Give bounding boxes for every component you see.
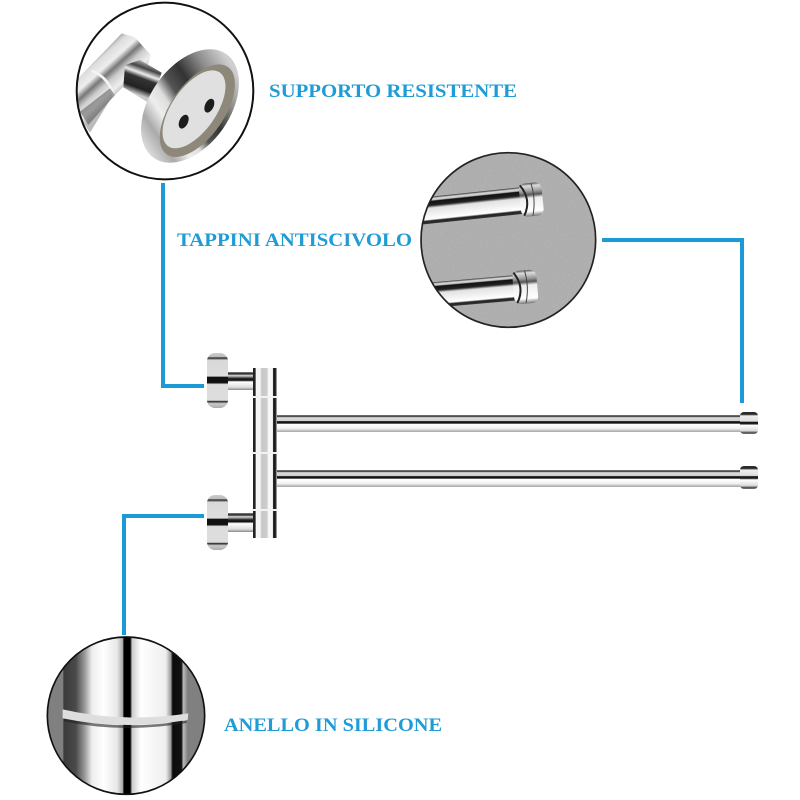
vertical column — [253, 368, 277, 538]
lower wall disc — [207, 495, 228, 550]
lower tube and cap — [432, 270, 538, 306]
connector line: anello to lower mount — [124, 516, 204, 635]
lower bar cap — [740, 466, 758, 489]
screw hole left — [177, 113, 191, 130]
upper stem — [226, 372, 255, 390]
silicone rings — [252, 396, 278, 511]
detail circle: anti-slip caps — [413, 152, 597, 328]
heading: anello in silicone: ANELLO IN SILICONE — [224, 715, 442, 736]
upper swing bar — [272, 415, 742, 432]
upper tube and cap — [423, 182, 544, 224]
heading: supporto resistente: SUPPORTO RESISTENTE — [269, 81, 517, 102]
connector line: supporto to upper mount — [163, 183, 204, 386]
detail circle: silicone ring — [47, 635, 205, 798]
upper wall disc — [207, 353, 228, 408]
silicone band — [63, 709, 188, 725]
detail circle: wall mount support — [73, 3, 259, 181]
heading: tappini antiscivolo: TAPPINI ANTISCIVOLO — [177, 230, 412, 251]
screw hole right — [202, 97, 216, 114]
upper bar cap — [740, 412, 758, 434]
lower swing bar — [272, 470, 742, 487]
towel rack product — [207, 353, 758, 550]
connector line: tappini to bar end — [602, 240, 742, 403]
lower stem — [226, 513, 255, 532]
